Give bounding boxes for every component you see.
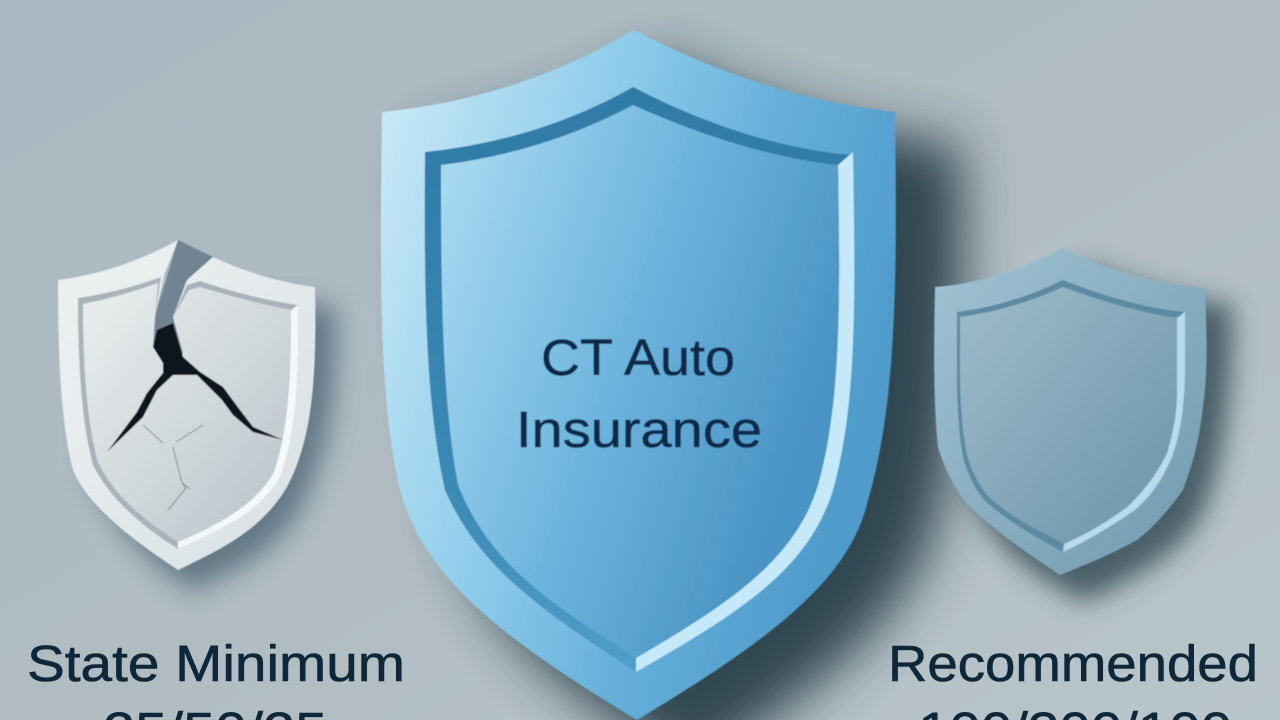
central label: Insurance (516, 401, 762, 458)
shield body with notch (58, 240, 315, 570)
label: state minimum (27, 635, 405, 720)
label: recommended (888, 635, 1258, 720)
inner groove (78, 277, 298, 549)
label: recommended: Recommended (888, 635, 1258, 692)
shield outer frame (381, 30, 896, 720)
central shield (381, 30, 896, 720)
crack gap backing (153, 240, 213, 375)
central label: CT Auto (541, 329, 735, 386)
recommended shield (934, 248, 1207, 575)
hairline cracks (143, 425, 203, 510)
shield groove (957, 280, 1183, 552)
label: state minimum: State Minimum (27, 635, 405, 692)
main crack (107, 323, 283, 452)
inner panel (83, 283, 291, 542)
shadow: cracked shield (90, 300, 336, 592)
shield outer frame (934, 248, 1207, 575)
shadow: central shield (425, 60, 962, 720)
shield inner panel (441, 105, 839, 658)
cracked shield: state minimum (58, 240, 315, 570)
shield groove (425, 87, 851, 672)
shadow: recommended shield (965, 265, 1232, 602)
central label (516, 329, 762, 458)
shield highlight bevel (636, 152, 854, 672)
lower highlight (178, 305, 298, 549)
shield highlight bevel (1063, 312, 1185, 552)
shield inner panel (960, 287, 1177, 544)
